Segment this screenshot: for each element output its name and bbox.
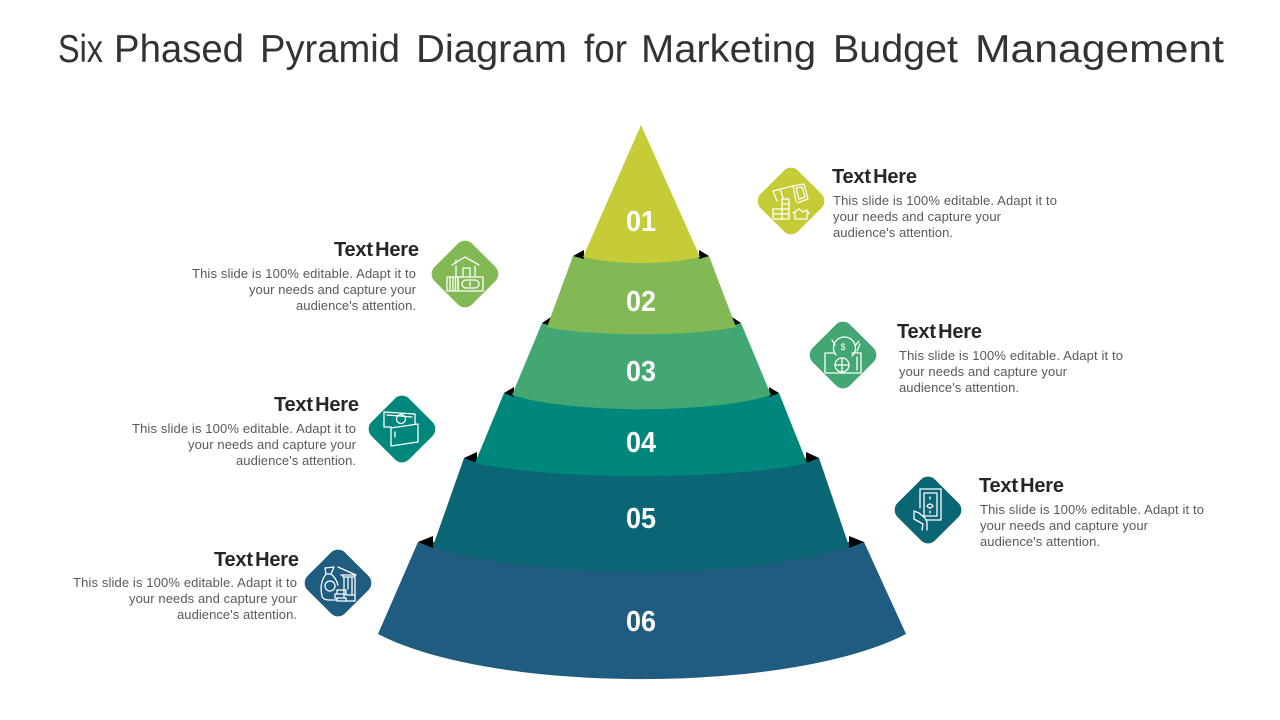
heading: Text Here	[832, 166, 917, 188]
layer 04	[475, 387, 807, 476]
icon: piggy bank and globe: $	[840, 342, 846, 352]
layer 01: 01	[626, 206, 656, 238]
heading: Text Here	[334, 239, 419, 261]
title: Diagram	[416, 28, 567, 71]
callout: phase 03	[806, 318, 1123, 395]
title: Marketing	[641, 28, 816, 71]
description: This slide is 100% editable. Adapt it to	[192, 266, 416, 281]
description	[899, 348, 1123, 395]
icon: hand holding banknote	[891, 473, 965, 547]
heading: Text Here	[274, 394, 359, 416]
description: audience's attention.	[833, 225, 953, 240]
description	[73, 575, 298, 622]
description: audience's attention.	[899, 380, 1019, 395]
title: Phased	[114, 28, 244, 71]
description: audience's attention.	[296, 298, 416, 313]
layer 03: 03	[626, 356, 656, 388]
description: audience's attention.	[980, 534, 1100, 549]
callout: phase 04	[132, 392, 439, 468]
title: for	[584, 28, 627, 71]
description: your needs and capture your	[980, 518, 1149, 533]
description: your needs and capture your	[188, 437, 357, 452]
description: your needs and capture your	[899, 364, 1068, 379]
icon: wallet and banknote	[365, 392, 439, 466]
description: your needs and capture your	[129, 591, 298, 606]
description	[192, 266, 417, 313]
callout: phase 05	[891, 473, 1204, 549]
callout: phase 01	[754, 164, 1057, 240]
description: audience's attention.	[177, 607, 297, 622]
title	[58, 28, 1224, 71]
description: This slide is 100% editable. Adapt it to	[899, 348, 1123, 363]
layer 02	[547, 250, 736, 334]
description: This slide is 100% editable. Adapt it to	[980, 502, 1204, 517]
heading: Text Here	[897, 321, 982, 343]
callout: phase 02	[192, 237, 502, 313]
icon: house and banknote	[428, 237, 502, 311]
description: This slide is 100% editable. Adapt it to	[73, 575, 297, 590]
layer 05	[433, 452, 849, 571]
description	[980, 502, 1204, 549]
pyramid diagram	[378, 125, 906, 679]
layer 06: 06	[626, 606, 656, 638]
layer 03	[512, 317, 771, 409]
description	[833, 193, 1057, 240]
heading: Text Here	[214, 549, 299, 571]
title: Pyramid	[260, 28, 400, 71]
title: Management	[975, 28, 1224, 71]
description: your needs and capture your	[833, 209, 1002, 224]
description: your needs and capture your	[249, 282, 417, 297]
heading: Text Here	[979, 475, 1064, 497]
title: Budget	[833, 28, 958, 71]
layer 02: 02	[626, 286, 656, 318]
icon: money bag and bank	[301, 546, 375, 620]
layer 04: 04	[626, 427, 656, 459]
callout: phase 06	[73, 546, 375, 622]
icon: money papers, coins and house	[754, 164, 828, 238]
description: audience's attention.	[236, 453, 356, 468]
description	[132, 421, 357, 468]
description: This slide is 100% editable. Adapt it to	[833, 193, 1057, 208]
title: Six	[58, 28, 103, 71]
layer 06	[378, 536, 906, 679]
icon: piggy bank and globe	[806, 318, 880, 392]
description: This slide is 100% editable. Adapt it to	[132, 421, 356, 436]
layer 01	[583, 125, 700, 263]
layer 05: 05	[626, 503, 656, 535]
